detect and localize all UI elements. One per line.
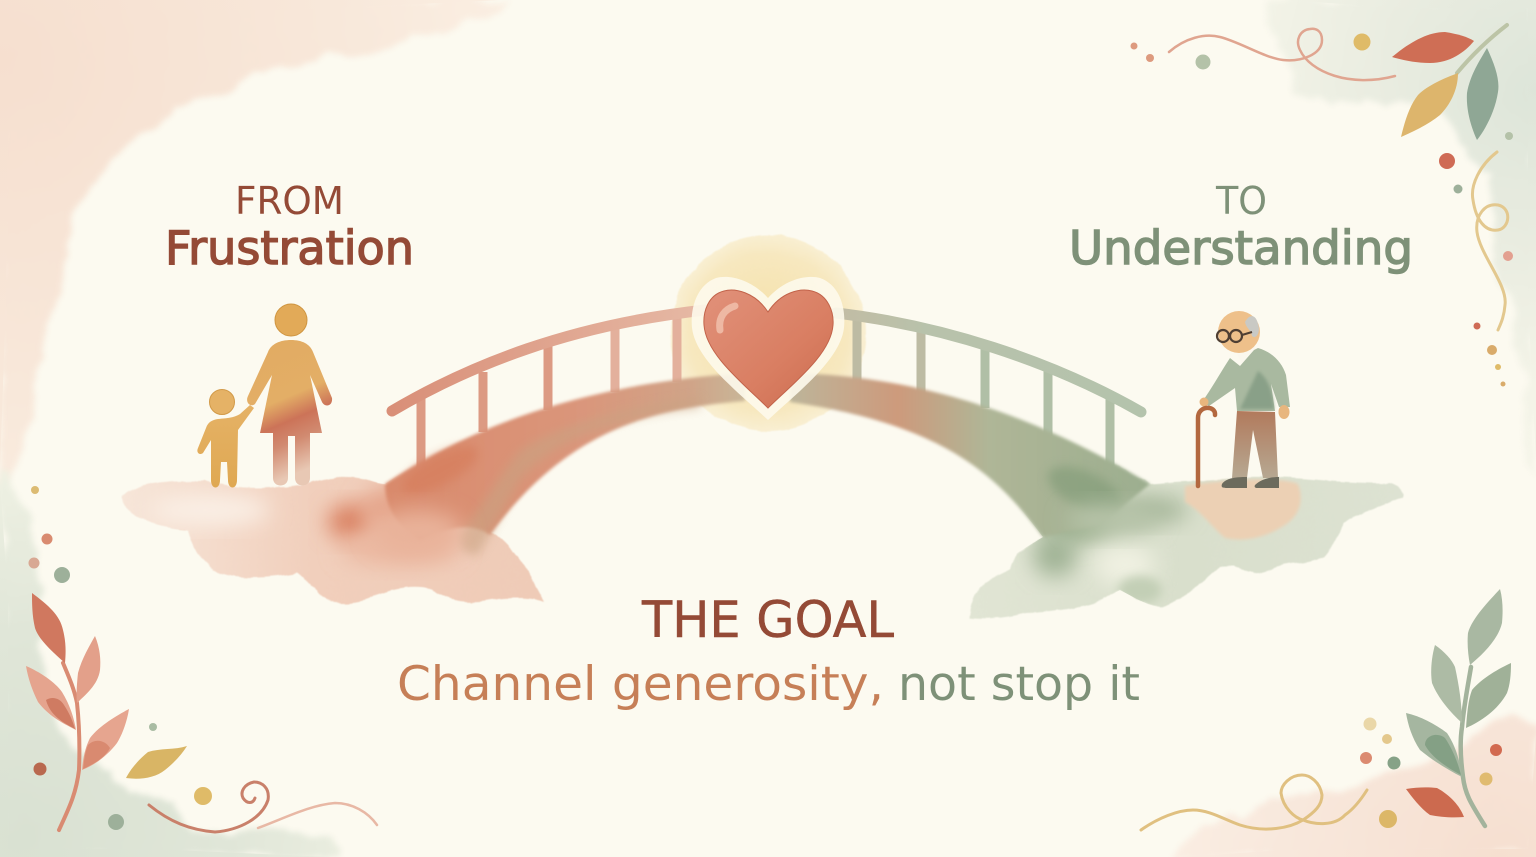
collar xyxy=(1236,346,1258,366)
second flourish xyxy=(258,803,377,828)
wash: top-left peach xyxy=(0,0,510,490)
right handrail and posts xyxy=(836,313,1141,466)
swirl line xyxy=(1169,29,1395,80)
swirl line xyxy=(1141,775,1367,830)
peach ground under the man xyxy=(1185,480,1301,539)
heading: to understanding: Understanding xyxy=(1069,221,1413,275)
heart icon xyxy=(692,277,844,420)
decoration: bottom-right leaves and swirl xyxy=(1141,589,1511,830)
wash: top-right sage xyxy=(1263,0,1536,480)
figure: mother and child xyxy=(197,304,332,488)
right cliff: watercolor cloud xyxy=(970,462,1404,619)
cane xyxy=(1198,408,1215,486)
swirl line xyxy=(149,782,268,832)
child xyxy=(197,390,254,488)
dots xyxy=(1130,34,1513,386)
heading: from frustration xyxy=(165,179,414,275)
figure: elderly man with cane xyxy=(1198,311,1290,488)
head with glasses xyxy=(1217,311,1260,353)
trousers xyxy=(1232,411,1278,478)
decoration: bottom-left leaves and swirl xyxy=(26,486,377,832)
goal statement xyxy=(397,591,1140,712)
heading: from frustration: FROM xyxy=(235,179,344,223)
bridge left half xyxy=(372,310,745,555)
wash: bottom-right peach xyxy=(1167,713,1536,857)
dots xyxy=(28,486,212,830)
mother xyxy=(247,304,332,486)
heading: from frustration: Frustration xyxy=(165,221,414,275)
dots xyxy=(1360,718,1502,828)
left deck xyxy=(385,373,745,540)
right deck xyxy=(790,373,1150,537)
glow behind heart xyxy=(670,235,866,431)
hands xyxy=(1200,398,1290,419)
goal statement: Channel generosity, xyxy=(397,657,884,712)
shoes xyxy=(1222,477,1279,488)
heading: to understanding: TO xyxy=(1215,179,1267,223)
heading: to understanding xyxy=(1069,179,1413,275)
wash: bottom-left sage xyxy=(0,470,347,857)
leaves xyxy=(1392,25,1507,140)
right vine xyxy=(1472,152,1508,330)
left cliff: watercolor cloud xyxy=(122,477,545,603)
goal statement: not stop it xyxy=(898,657,1140,712)
bridge right half xyxy=(790,313,1158,537)
left handrail and posts xyxy=(392,310,705,468)
sweater xyxy=(1202,348,1290,411)
goal statement: THE GOAL xyxy=(641,591,894,649)
branch with leaves xyxy=(26,593,187,830)
branch with leaves xyxy=(1406,589,1511,826)
decoration: top-right leaves and swirl xyxy=(1130,25,1513,386)
